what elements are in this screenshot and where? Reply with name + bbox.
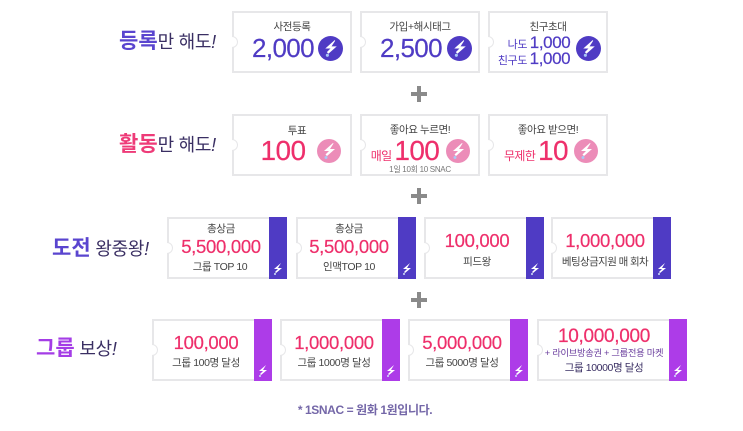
value: 5,500,000 [309, 236, 389, 257]
value: 100,000 [174, 332, 238, 353]
value: 2,000 [252, 33, 314, 63]
value: 매일 100 [371, 135, 439, 166]
icon: bolt coin [317, 139, 341, 163]
value: 5,500,000 [181, 236, 261, 257]
sublabel: 그룹 5000명 달성 [425, 357, 499, 369]
sublabel: 피드왕 [463, 256, 491, 268]
value: 친구도 1,000: 친구도 1,000 [498, 49, 570, 68]
heading: 활동만 해도: 활동만 해도! [119, 133, 216, 156]
icon: bolt coin [574, 139, 598, 163]
card: 그룹 10000명 달성 [537, 319, 687, 381]
note: 1일 10회 10 SNAC [389, 165, 451, 174]
icon: bolt coin [447, 36, 472, 61]
card: 친구초대 [488, 11, 608, 73]
value: 1,000,000 [294, 332, 374, 353]
value: 나도 1,000: 나도 1,000 [508, 33, 570, 52]
card: 베팅상금지원 [551, 217, 671, 279]
card: 그룹 5000명 달성 [408, 319, 528, 381]
sublabel: 그룹 TOP 10 [193, 261, 247, 273]
icon: bolt coin [318, 36, 343, 61]
value: 100,000 [445, 230, 509, 251]
card: 투표 100 [232, 114, 352, 176]
card: 피드왕 [424, 217, 544, 279]
heading: 도전 왕중왕: 도전 왕중왕! [52, 237, 149, 260]
heading: 등록만 해도: 등록만 해도! [119, 30, 216, 53]
bolt band [398, 217, 416, 279]
card: 사전등록 2,000 [232, 11, 352, 73]
card: 총상금 인맥TOP 10 [296, 217, 416, 279]
bolt band [653, 217, 671, 279]
card: 그룹 1000명 달성 [280, 319, 400, 381]
card: 좋아요 받으면 [488, 114, 608, 176]
value: 100 [261, 135, 305, 166]
label: 좋아요 받으면! [518, 124, 578, 136]
sublabel: 인맥TOP 10 [323, 261, 375, 273]
bolt band [526, 217, 544, 279]
sublabel: 그룹 10000명 달성 [565, 362, 643, 374]
bolt band [382, 319, 400, 381]
value: 무제한 10 [504, 135, 568, 166]
icon: plus [411, 86, 427, 102]
card: 좋아요 누르면 [360, 114, 480, 176]
footnote: * 1SNAC = 원화 1원입니다. [298, 403, 432, 417]
icon: bolt coin [576, 36, 601, 61]
icon: plus [411, 292, 427, 308]
label: 투표 [288, 125, 306, 137]
icon: plus [411, 188, 427, 204]
label: 총상금 [335, 223, 363, 235]
bolt band [269, 217, 287, 279]
card: 가입+해시태그 2,500 [360, 11, 480, 73]
sublabel: 베팅상금지원 매 회차 [562, 256, 648, 268]
card: 그룹 100명 달성 [152, 319, 272, 381]
icon: bolt coin [446, 139, 470, 163]
label: 가입+해시태그 [389, 21, 451, 33]
heading: 그룹 보상: 그룹 보상! [36, 337, 117, 360]
sublabel: 그룹 100명 달성 [172, 357, 240, 369]
label: 총상금 [207, 223, 235, 235]
sublabel: 그룹 1000명 달성 [297, 357, 371, 369]
value: 1,000,000 [565, 230, 645, 251]
label: 친구초대 [529, 21, 567, 33]
label: 사전등록 [273, 21, 311, 33]
value: 2,500 [380, 33, 442, 63]
card: 총상금 그룹 TOP 10 [167, 217, 287, 279]
perks: + 라이브방송권 + 그룹전용 마켓 [545, 348, 663, 358]
value: 5,000,000 [422, 332, 502, 353]
bolt band [254, 319, 272, 381]
value: 10,000,000 [558, 326, 650, 347]
bolt band [510, 319, 528, 381]
label: 좋아요 누르면! [390, 124, 450, 136]
bolt band [669, 319, 687, 381]
